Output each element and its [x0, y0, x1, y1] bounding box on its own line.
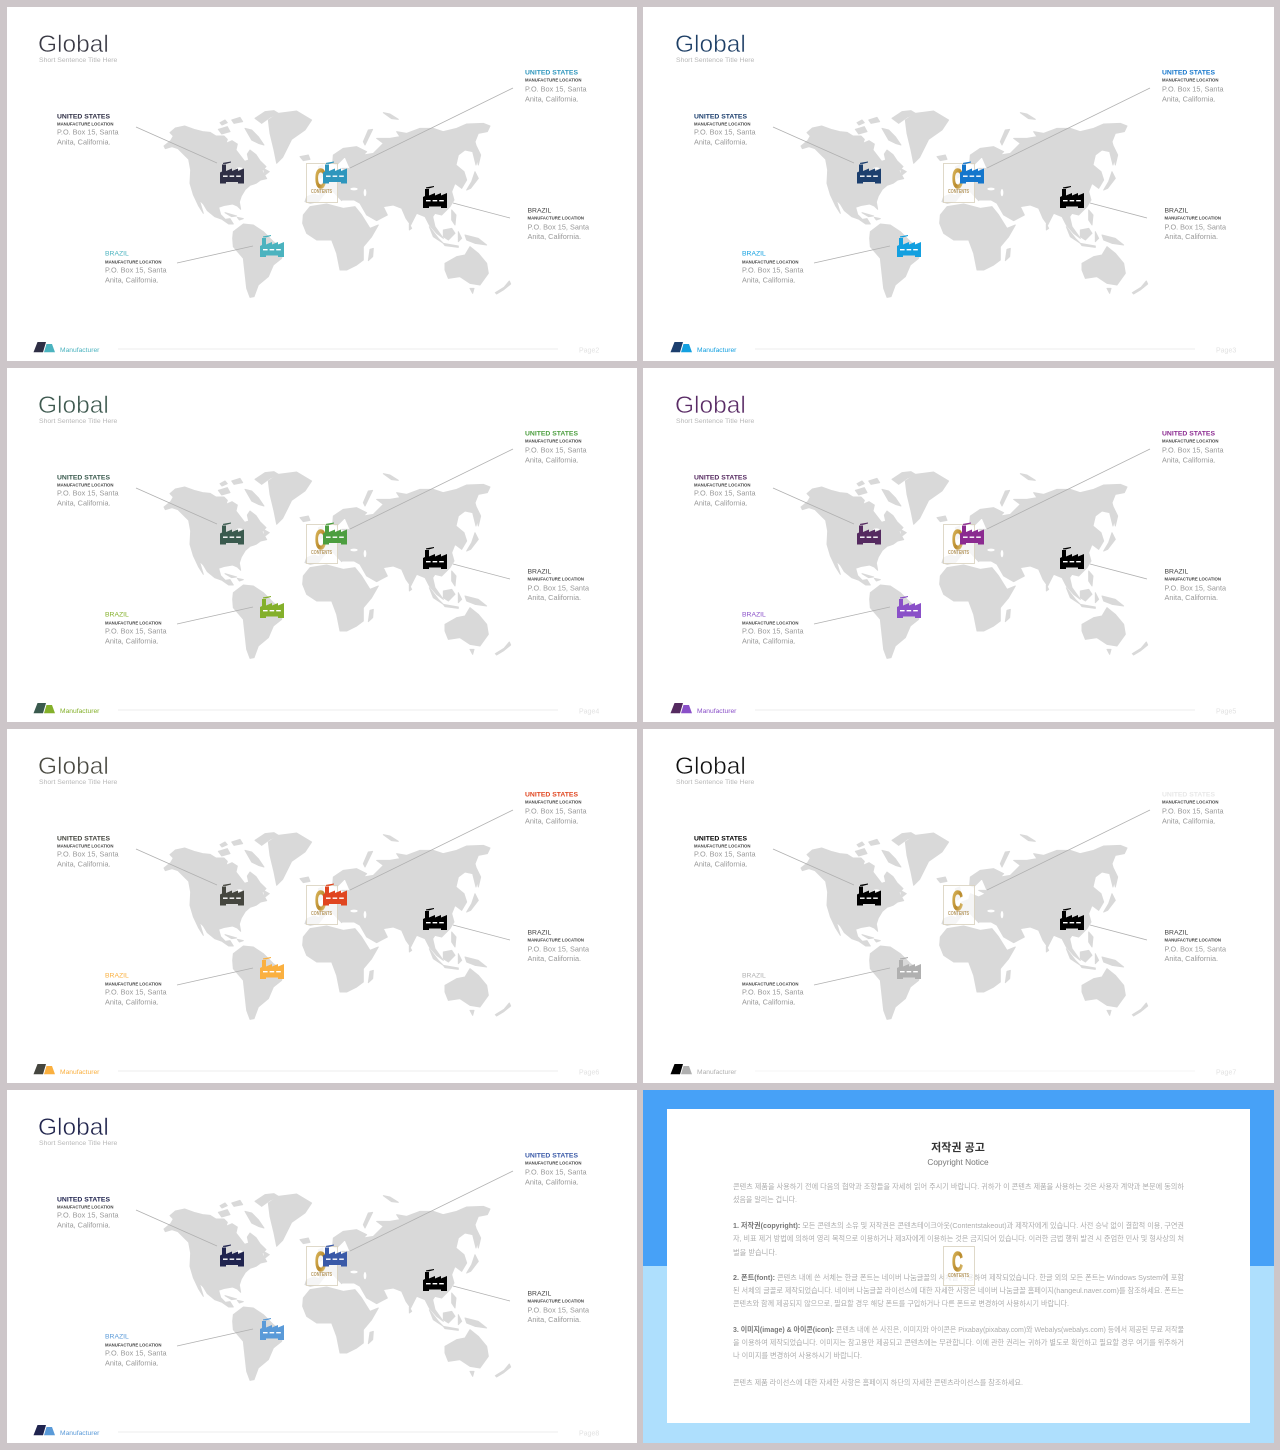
icon: factory North America — [220, 884, 244, 906]
world map — [801, 472, 1148, 658]
callout: left United States: Anita, California. — [694, 860, 748, 868]
footer label: Manufacturer — [60, 347, 100, 354]
callout: left United States: MANUFACTURE LOCATION — [694, 122, 750, 126]
icon: factory North America — [857, 162, 881, 184]
callout: right United States: MANUFACTURE LOCATION — [525, 800, 582, 804]
callout: left United States: UNITED STATES — [694, 114, 747, 120]
footer label: Manufacturer — [697, 347, 737, 354]
callout: left United States — [57, 474, 119, 508]
subtitle: Short Sentence Title Here — [39, 418, 118, 425]
callout: left Brazil: BRAZIL — [105, 250, 129, 258]
leader lines — [136, 810, 513, 985]
callout: left Brazil — [742, 250, 804, 284]
callout: right Brazil: MANUFACTURE LOCATION — [528, 1298, 584, 1304]
logo watermark: CONTENTS — [311, 189, 332, 195]
paragraph: font — [733, 1273, 1184, 1308]
footer logo — [34, 1425, 55, 1435]
callout: right United States: P.O. Box 15, Santa — [1162, 84, 1224, 94]
callout: left Brazil: MANUFACTURE LOCATION — [105, 260, 162, 264]
callout: left United States: UNITED STATES — [57, 836, 110, 842]
callout: left United States: P.O. Box 15, Santa — [57, 850, 119, 858]
callout: right Brazil: BRAZIL — [528, 208, 552, 214]
world map — [164, 1194, 511, 1380]
logo watermark: CONTENTS — [311, 550, 332, 556]
callout: right United States — [525, 1152, 587, 1186]
callout: left United States: MANUFACTURE LOCATION — [57, 844, 114, 848]
callout: right Brazil: BRAZIL — [1164, 930, 1189, 936]
callout: left United States — [694, 114, 756, 146]
logo watermark — [306, 524, 338, 564]
title: Global — [675, 392, 746, 419]
logo watermark: CONTENTS — [311, 1272, 332, 1278]
callout: right Brazil: P.O. Box 15, Santa — [528, 944, 590, 954]
callout: left Brazil: P.O. Box 15, Santa — [742, 988, 804, 996]
footer logo — [670, 703, 692, 713]
callout: right Brazil — [1164, 208, 1227, 241]
callout: right Brazil: P.O. Box 15, Santa — [1164, 584, 1227, 592]
callout: right United States: Anita, California. — [1162, 94, 1216, 104]
title: Global — [38, 753, 109, 780]
callout: right United States: MANUFACTURE LOCATION — [1162, 800, 1218, 804]
world map — [164, 833, 511, 1019]
callout: right Brazil: MANUFACTURE LOCATION — [1164, 216, 1221, 220]
panel: slide page 6 — [7, 729, 637, 1083]
logo watermark — [306, 1246, 338, 1286]
callout: right Brazil: Anita, California. — [1164, 593, 1218, 602]
icon: factory Europe — [323, 162, 347, 184]
callout: right United States: P.O. Box 15, Santa — [1162, 446, 1224, 454]
callout: right Brazil: Anita, California. — [528, 954, 581, 963]
callout: left Brazil: P.O. Box 15, Santa — [742, 266, 804, 274]
callout: left Brazil: P.O. Box 15, Santa — [742, 626, 804, 636]
callout: right United States: UNITED STATES — [525, 1152, 578, 1160]
callout: left Brazil: BRAZIL — [742, 612, 766, 618]
subtitle: Short Sentence Title Here — [39, 779, 118, 786]
callout: left United States: P.O. Box 15, Santa — [694, 850, 756, 858]
callout: left Brazil: P.O. Box 15, Santa — [105, 1348, 167, 1358]
callout: left United States: P.O. Box 15, Santa — [57, 488, 119, 498]
callout: right Brazil: Anita, California. — [528, 1315, 581, 1324]
footer logo — [670, 1064, 692, 1074]
callout: left United States: MANUFACTURE LOCATION — [57, 122, 114, 126]
page number: Page6 — [579, 1070, 599, 1076]
callout: right Brazil: MANUFACTURE LOCATION — [1164, 576, 1221, 582]
callout: right Brazil: MANUFACTURE LOCATION — [528, 938, 584, 942]
notice heading: 저작권 공고 — [931, 1140, 985, 1154]
icon: factory Asia — [1060, 908, 1084, 930]
callout: right United States: Anita, California. — [525, 94, 579, 104]
callout: right United States: P.O. Box 15, Santa — [1162, 806, 1224, 816]
callout: right United States: MANUFACTURE LOCATION — [1162, 78, 1218, 82]
leader lines — [136, 1171, 513, 1346]
icon: factory South America — [897, 235, 921, 257]
callout: left Brazil — [105, 612, 167, 646]
icon: factory Asia — [423, 1269, 447, 1291]
icon: factory Europe — [323, 1244, 347, 1266]
intro paragraph — [733, 1182, 1184, 1204]
callout: right Brazil: P.O. Box 15, Santa — [528, 1306, 590, 1314]
icon: factory Asia — [423, 908, 447, 930]
notice subheading: Copyright Notice — [927, 1157, 989, 1167]
callout: right United States — [525, 792, 587, 826]
callout: left Brazil: Anita, California. — [105, 276, 159, 284]
callout: right Brazil: P.O. Box 15, Santa — [1164, 222, 1227, 232]
callout: right Brazil — [1164, 930, 1227, 963]
panel: slide page 8 — [7, 1090, 637, 1443]
icon: factory South America — [260, 957, 284, 979]
subtitle: Short Sentence Title Here — [676, 779, 755, 786]
callout: left Brazil: BRAZIL — [742, 250, 766, 258]
page number: Page8 — [579, 1430, 599, 1438]
callout: right Brazil: P.O. Box 15, Santa — [528, 584, 590, 592]
footer logo — [34, 342, 55, 352]
callout: right Brazil: Anita, California. — [528, 593, 581, 602]
callout: right United States: MANUFACTURE LOCATION — [525, 1160, 582, 1166]
logo watermark: C — [315, 1246, 326, 1277]
callout: right United States: UNITED STATES — [525, 792, 578, 798]
leader lines — [773, 810, 1150, 985]
title: Global — [38, 31, 109, 58]
page number: Page2 — [579, 348, 599, 354]
page number: Page5 — [1216, 708, 1236, 716]
callout: left United States — [694, 474, 756, 508]
callout: left United States: P.O. Box 15, Santa — [694, 128, 756, 136]
logo watermark: C — [952, 885, 963, 916]
logo watermark: CONTENTS — [948, 189, 969, 195]
title: Global — [38, 1114, 109, 1141]
world map — [164, 111, 511, 297]
callout: right United States: P.O. Box 15, Santa — [525, 1168, 587, 1176]
callout: right Brazil — [528, 208, 590, 241]
subtitle: Short Sentence Title Here — [676, 57, 755, 64]
callout: left United States — [694, 836, 756, 868]
paragraph: font: 콘텐츠와 함께 제공되지 않으므로, 필요할 경우 해당 폰트를 구입하거나 다른 폰트로 변경하여 사용하시기 바랍니다. — [733, 1299, 1069, 1308]
callout: left United States: MANUFACTURE LOCATION — [694, 482, 750, 488]
logo watermark: CONTENTS — [948, 1273, 969, 1279]
paragraph: copyright: 벌을 받습니다. — [733, 1248, 777, 1257]
logo watermark — [944, 1246, 974, 1286]
paragraph: copyright: 자, 비표 제거 방법에 의하여 영리 목적으로 이용하거나 제3자에게 이용하는 것은 금지되어 있습니다. 이러한 금법 행위 발견 시 준엄한 민사 및 형사상의 처 — [733, 1234, 1184, 1243]
logo watermark: CONTENTS — [948, 550, 969, 556]
paragraph: font: 2. 폰트(font): 콘텐츠 내에 쓴 서체는 한글 폰트는 네이버 나눔글꼴의 서체를 사용하여 제작되었습니다. 한글 외의 모든 폰트는 Windows System에 포함 — [733, 1273, 1184, 1282]
callout: right Brazil — [528, 930, 590, 963]
callout: left Brazil: Anita, California. — [105, 636, 159, 646]
icon: factory North America — [857, 884, 881, 906]
logo watermark: C — [315, 885, 326, 916]
callout: left United States: Anita, California. — [694, 138, 748, 146]
callout: left United States: UNITED STATES — [57, 1196, 110, 1204]
callout: right Brazil: BRAZIL — [528, 568, 552, 576]
callout: left United States: Anita, California. — [57, 1220, 111, 1230]
callout: left Brazil: MANUFACTURE LOCATION — [742, 260, 798, 264]
callout: right Brazil: P.O. Box 15, Santa — [528, 222, 590, 232]
callout: left Brazil: Anita, California. — [105, 998, 159, 1006]
callout: right United States: UNITED STATES — [525, 70, 578, 76]
footer label: Manufacturer — [697, 1069, 737, 1076]
callout: left Brazil — [742, 972, 804, 1006]
icon: factory Europe — [323, 884, 347, 906]
panel: slide page 7 — [643, 729, 1274, 1083]
callout: left Brazil: P.O. Box 15, Santa — [105, 988, 167, 996]
callout: right Brazil: P.O. Box 15, Santa — [1164, 944, 1227, 954]
callout: left United States: MANUFACTURE LOCATION — [694, 844, 750, 848]
callout: right United States: MANUFACTURE LOCATION — [525, 78, 582, 82]
callout: right United States: UNITED STATES — [1162, 430, 1215, 438]
subtitle: Short Sentence Title Here — [39, 1140, 118, 1147]
callout: right United States: Anita, California. — [1162, 456, 1216, 464]
icon: factory Europe — [960, 162, 984, 184]
callout: right United States: UNITED STATES — [525, 430, 578, 438]
callout: right United States: Anita, California. — [525, 1178, 579, 1186]
icon: factory Asia — [423, 547, 447, 569]
logo watermark: CONTENTS — [311, 911, 332, 917]
callout: left Brazil: MANUFACTURE LOCATION — [105, 620, 162, 626]
leader lines — [136, 88, 513, 263]
callout: right Brazil: Anita, California. — [1164, 232, 1218, 241]
callout: left United States: Anita, California. — [57, 860, 111, 868]
logo watermark: CONTENTS — [948, 911, 969, 917]
callout: left Brazil — [105, 972, 167, 1006]
callout: left Brazil — [105, 1334, 167, 1368]
footer label: Manufacturer — [60, 708, 100, 715]
paragraph: images and icons — [733, 1325, 1184, 1360]
callout: left United States: Anita, California. — [57, 138, 111, 146]
paragraph: images and icons: 3. 이미지(image) & 아이콘(icon): 콘텐츠 내에 쓴 사진은, 이미지와 아이콘은 Pixabay(pixabay.com)와 Webalys(webalys.com) 등에서 제공된 무료 저작물 — [733, 1325, 1184, 1334]
callout: left Brazil: MANUFACTURE LOCATION — [742, 982, 798, 986]
callout: left Brazil: MANUFACTURE LOCATION — [105, 1342, 162, 1348]
logo watermark — [306, 163, 338, 202]
panel: slide page 5 — [643, 368, 1274, 722]
page number: Page3 — [1216, 348, 1236, 354]
paragraph: images and icons: 나 이미지를 변경하여 사용하시기 바랍니다. — [733, 1351, 862, 1360]
callout: right Brazil: BRAZIL — [528, 1290, 552, 1298]
callout: right Brazil — [528, 1290, 590, 1324]
icon: factory South America — [260, 235, 284, 257]
callout: left Brazil: Anita, California. — [105, 1358, 159, 1368]
title: Global — [675, 31, 746, 58]
logo watermark — [306, 885, 338, 924]
icon: factory North America — [220, 522, 244, 544]
callout: right United States — [525, 70, 587, 104]
callout: left Brazil: Anita, California. — [742, 636, 796, 646]
callout: left Brazil: MANUFACTURE LOCATION — [742, 620, 798, 626]
callout: left Brazil: BRAZIL — [105, 1334, 129, 1340]
title: Global — [675, 753, 746, 780]
icon: factory North America — [220, 1244, 244, 1266]
callout: right Brazil: BRAZIL — [1164, 208, 1189, 214]
callout: right United States — [1162, 70, 1224, 104]
panel: slide page 3 — [643, 7, 1274, 361]
callout: right Brazil: MANUFACTURE LOCATION — [528, 576, 584, 582]
callout: right United States: P.O. Box 15, Santa — [525, 84, 587, 94]
callout: right Brazil: MANUFACTURE LOCATION — [1164, 938, 1221, 942]
icon: factory South America — [897, 596, 921, 618]
callout: right Brazil: BRAZIL — [528, 930, 552, 936]
logo watermark: C — [952, 1246, 963, 1277]
callout: left United States — [57, 114, 119, 146]
callout: right United States: Anita, California. — [525, 456, 579, 464]
icon: factory South America — [897, 957, 921, 979]
title: Global — [38, 392, 109, 419]
callout: left Brazil: Anita, California. — [742, 998, 796, 1006]
page number: Page7 — [1216, 1070, 1236, 1076]
callout: left United States: MANUFACTURE LOCATION — [57, 482, 114, 488]
leader lines — [773, 88, 1150, 263]
white notice card — [667, 1109, 1250, 1423]
panel: slide page 2 — [7, 7, 637, 361]
callout: right Brazil — [1164, 568, 1227, 602]
callout: right Brazil: MANUFACTURE LOCATION — [528, 216, 584, 220]
callout: right United States: Anita, California. — [1162, 816, 1216, 826]
callout: right United States: P.O. Box 15, Santa — [525, 806, 587, 816]
callout: right United States — [1162, 792, 1224, 826]
callout: left Brazil: BRAZIL — [742, 972, 766, 980]
logo watermark: C — [952, 524, 963, 555]
footer label: Manufacturer — [60, 1069, 100, 1076]
page number: Page4 — [579, 708, 599, 716]
callout: left Brazil: BRAZIL — [105, 612, 129, 618]
closing paragraph: 콘텐츠 제품 라이선스에 대한 자세한 사항은 홈페이지 하단의 자세한 콘텐츠라이선스를 참조하세요. — [733, 1378, 1023, 1387]
icon: factory Europe — [323, 522, 347, 544]
callout: left United States — [57, 836, 119, 868]
leader lines — [773, 449, 1150, 624]
callout: right United States — [525, 430, 587, 464]
callout: left Brazil — [742, 612, 804, 646]
footer logo — [670, 342, 692, 352]
callout: left United States: P.O. Box 15, Santa — [57, 128, 119, 136]
callout: right Brazil: Anita, California. — [1164, 954, 1218, 963]
callout: left Brazil: MANUFACTURE LOCATION — [105, 982, 162, 986]
callout: right United States: MANUFACTURE LOCATION — [1162, 438, 1218, 444]
intro paragraph: 셨음을 알리는 겁니다. — [733, 1195, 797, 1204]
intro paragraph: 콘텐츠 제품을 사용하기 전에 다음의 협약과 조항들을 자세히 읽어 주시기 바랍니다. 귀하가 이 콘텐츠 제품을 사용하는 것은 사용자 계약과 본문에 동의하 — [733, 1182, 1184, 1191]
paragraph: font: 된 서체의 글꼴로 제작되었습니다. 네이버 나눔글꼴 라이선스에 대한 자세한 사항은 네이버 나눔글꼴 홈페이지(hangeul.naver.com)를 참조하세요. 폰트는 — [733, 1286, 1184, 1295]
callout: left United States: Anita, California. — [694, 498, 748, 508]
callout: right United States: P.O. Box 15, Santa — [525, 446, 587, 454]
logo watermark: C — [952, 163, 963, 194]
icon: factory Asia — [1060, 186, 1084, 208]
paragraph: images and icons: 을 이용하여 제작되었습니다. 이미지는 참고용만 제공되고 콘텐츠에는 무관합니다. 이에 관한 권리는 귀하가 별도로 확인하고 필요할 경우 여기를 위주하거 — [733, 1338, 1184, 1347]
paragraph: copyright — [733, 1221, 1184, 1257]
callout: right Brazil — [528, 568, 590, 602]
logo watermark — [944, 885, 974, 924]
footer label: Manufacturer — [60, 1430, 100, 1437]
panel: slide page 4 — [7, 368, 637, 722]
subtitle: Short Sentence Title Here — [676, 418, 755, 425]
icon: factory Asia — [423, 186, 447, 208]
footer label: Manufacturer — [697, 708, 737, 715]
subtitle: Short Sentence Title Here — [39, 57, 118, 64]
footer logo — [34, 1064, 55, 1074]
icon: factory South America — [260, 596, 284, 618]
callout: right United States: MANUFACTURE LOCATION — [525, 438, 582, 444]
callout: left United States: P.O. Box 15, Santa — [57, 1210, 119, 1220]
paragraph: copyright: 1. 저작권(copyright): 모든 콘텐츠의 소유 및 저작권은 콘텐츠테이크아웃(Contentstakeout)과 제작자에게 있습니다. 사전 승낙 없이 결합적 이용, 구연권 — [733, 1221, 1184, 1230]
logo watermark: C — [315, 524, 326, 555]
panel: copyright notice — [643, 1090, 1274, 1443]
callout: left United States: UNITED STATES — [694, 836, 747, 842]
icon: factory South America — [260, 1318, 284, 1340]
callout: right Brazil: BRAZIL — [1164, 568, 1189, 576]
callout: left Brazil: P.O. Box 15, Santa — [105, 626, 167, 636]
callout: right United States: Anita, California. — [525, 816, 579, 826]
callout: left United States: MANUFACTURE LOCATION — [57, 1204, 114, 1210]
icon: factory North America — [857, 522, 881, 544]
callout: left United States — [57, 1196, 119, 1230]
leader lines — [136, 449, 513, 624]
callout: right United States — [1162, 430, 1224, 464]
world map — [801, 111, 1148, 297]
callout: left Brazil — [105, 250, 167, 284]
callout: right United States: UNITED STATES — [1162, 70, 1215, 76]
callout: left United States: UNITED STATES — [694, 474, 747, 482]
logo watermark — [944, 163, 974, 202]
callout: right Brazil: Anita, California. — [528, 232, 581, 241]
callout: left United States: UNITED STATES — [57, 114, 110, 120]
icon: factory North America — [220, 162, 244, 184]
callout: left United States: Anita, California. — [57, 498, 111, 508]
callout: left United States: P.O. Box 15, Santa — [694, 488, 756, 498]
callout: left Brazil: BRAZIL — [105, 972, 129, 980]
icon: factory Asia — [1060, 547, 1084, 569]
footer logo — [34, 703, 55, 713]
icon: factory Europe — [960, 522, 984, 544]
logo watermark: C — [315, 163, 326, 194]
world map — [801, 833, 1148, 1019]
callout: left Brazil: P.O. Box 15, Santa — [105, 266, 167, 274]
callout: right United States: UNITED STATES — [1162, 792, 1215, 798]
callout: left Brazil: Anita, California. — [742, 276, 796, 284]
callout: left United States: UNITED STATES — [57, 474, 110, 482]
logo watermark — [944, 524, 974, 564]
world map — [164, 472, 511, 658]
